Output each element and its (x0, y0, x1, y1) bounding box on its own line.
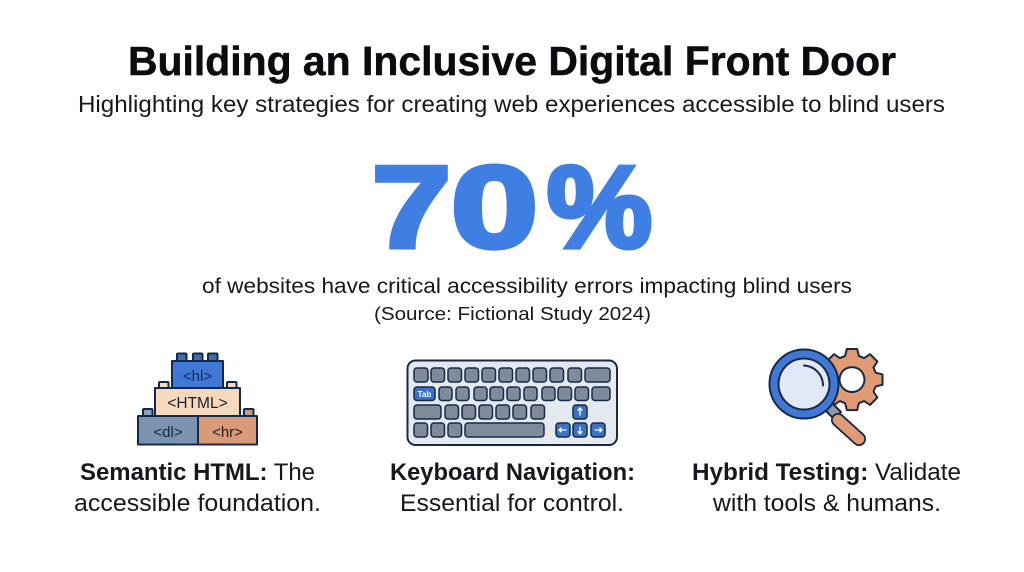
feature: hybrid testing caption: Hybrid Testing: Validate (692, 459, 961, 486)
feature: keyboard navigation caption: Essential for control. (400, 490, 624, 517)
title: Building an Inclusive Digital Front Door (128, 38, 896, 84)
icon: keyboard: Tab (418, 390, 431, 399)
subtitle: Highlighting key strategies for creating web experiences accessible to blind users (78, 91, 945, 117)
feature: hybrid testing caption: with tools & humans. (712, 490, 941, 517)
statistic description: of websites have critical accessibility errors impacting blind users (202, 274, 852, 298)
feature: semantic html caption (74, 459, 321, 517)
icon: HTML building blocks: <dl> (153, 424, 183, 441)
feature: hybrid testing caption (692, 459, 961, 517)
feature: semantic html caption: Semantic HTML: The (80, 459, 315, 486)
feature: keyboard navigation caption (390, 459, 635, 517)
big statistic: % (547, 142, 652, 272)
big statistic: 7 (372, 142, 451, 272)
big statistic (372, 142, 652, 272)
icon: keyboard (408, 360, 617, 445)
feature: semantic html caption: accessible foundation. (74, 490, 321, 517)
icon: HTML building blocks: <hr> (212, 424, 243, 441)
icon: HTML building blocks (138, 354, 257, 444)
icon: HTML building blocks: <hl> (183, 368, 212, 385)
feature: keyboard navigation caption: Keyboard Navigation: (390, 459, 635, 486)
big statistic: 0 (451, 142, 538, 272)
statistic source: (Source: Fictional Study 2024) (374, 304, 651, 324)
icon: HTML building blocks: <HTML> (167, 395, 228, 412)
icon: magnifying glass and gear (770, 349, 883, 439)
